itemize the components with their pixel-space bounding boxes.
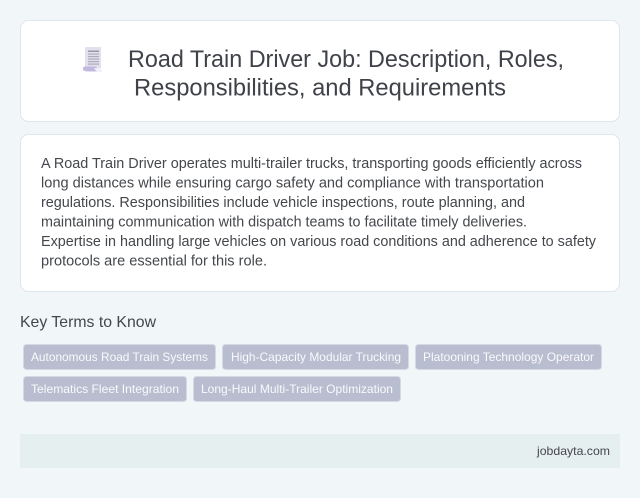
description text: regulations. Responsibilities include vehicle inspections, route planning, and	[41, 195, 525, 211]
title: Responsibilities, and Requirements	[134, 74, 506, 102]
key term tags	[24, 344, 602, 402]
tag: telematics fleet integration: Telematics Fleet Integration	[31, 382, 179, 396]
tag: autonomous road train systems: Autonomous Road Train Systems	[31, 350, 208, 364]
tag: high-capacity modular trucking: High-Capacity Modular Trucking	[231, 350, 401, 364]
icon: document scroll	[83, 47, 102, 72]
tag: platooning technology operator: Platooning Technology Operator	[423, 350, 594, 364]
panel: description card	[20, 134, 620, 292]
description text: long distances while ensuring cargo safety and compliance with transportation	[41, 176, 544, 192]
tag: autonomous road train systems	[24, 344, 216, 370]
footer bar	[20, 434, 620, 468]
footer bar: jobdayta.com	[536, 444, 610, 458]
description text: maintaining communication with dispatch teams to facilitate timely deliveries.	[41, 214, 527, 230]
title	[128, 46, 564, 102]
description text: A Road Train Driver operates multi-trailer trucks, transporting goods efficiently across	[41, 156, 582, 172]
description text: protocols are essential for this role.	[41, 254, 267, 270]
description text	[41, 156, 597, 270]
title: Road Train Driver Job: Description, Roles,	[128, 46, 564, 73]
tag: long-haul multi-trailer optimization: Long-Haul Multi-Trailer Optimization	[201, 382, 393, 396]
description text: Expertise in handling large vehicles on various road conditions and adherence to safety	[41, 234, 597, 250]
tag: telematics fleet integration	[24, 376, 186, 402]
tag: platooning technology operator	[416, 344, 602, 370]
tag: long-haul multi-trailer optimization	[194, 376, 400, 402]
panel: title card	[20, 20, 620, 122]
heading: key terms: Key Terms to Know	[20, 314, 156, 331]
tag: high-capacity modular trucking	[222, 344, 408, 370]
